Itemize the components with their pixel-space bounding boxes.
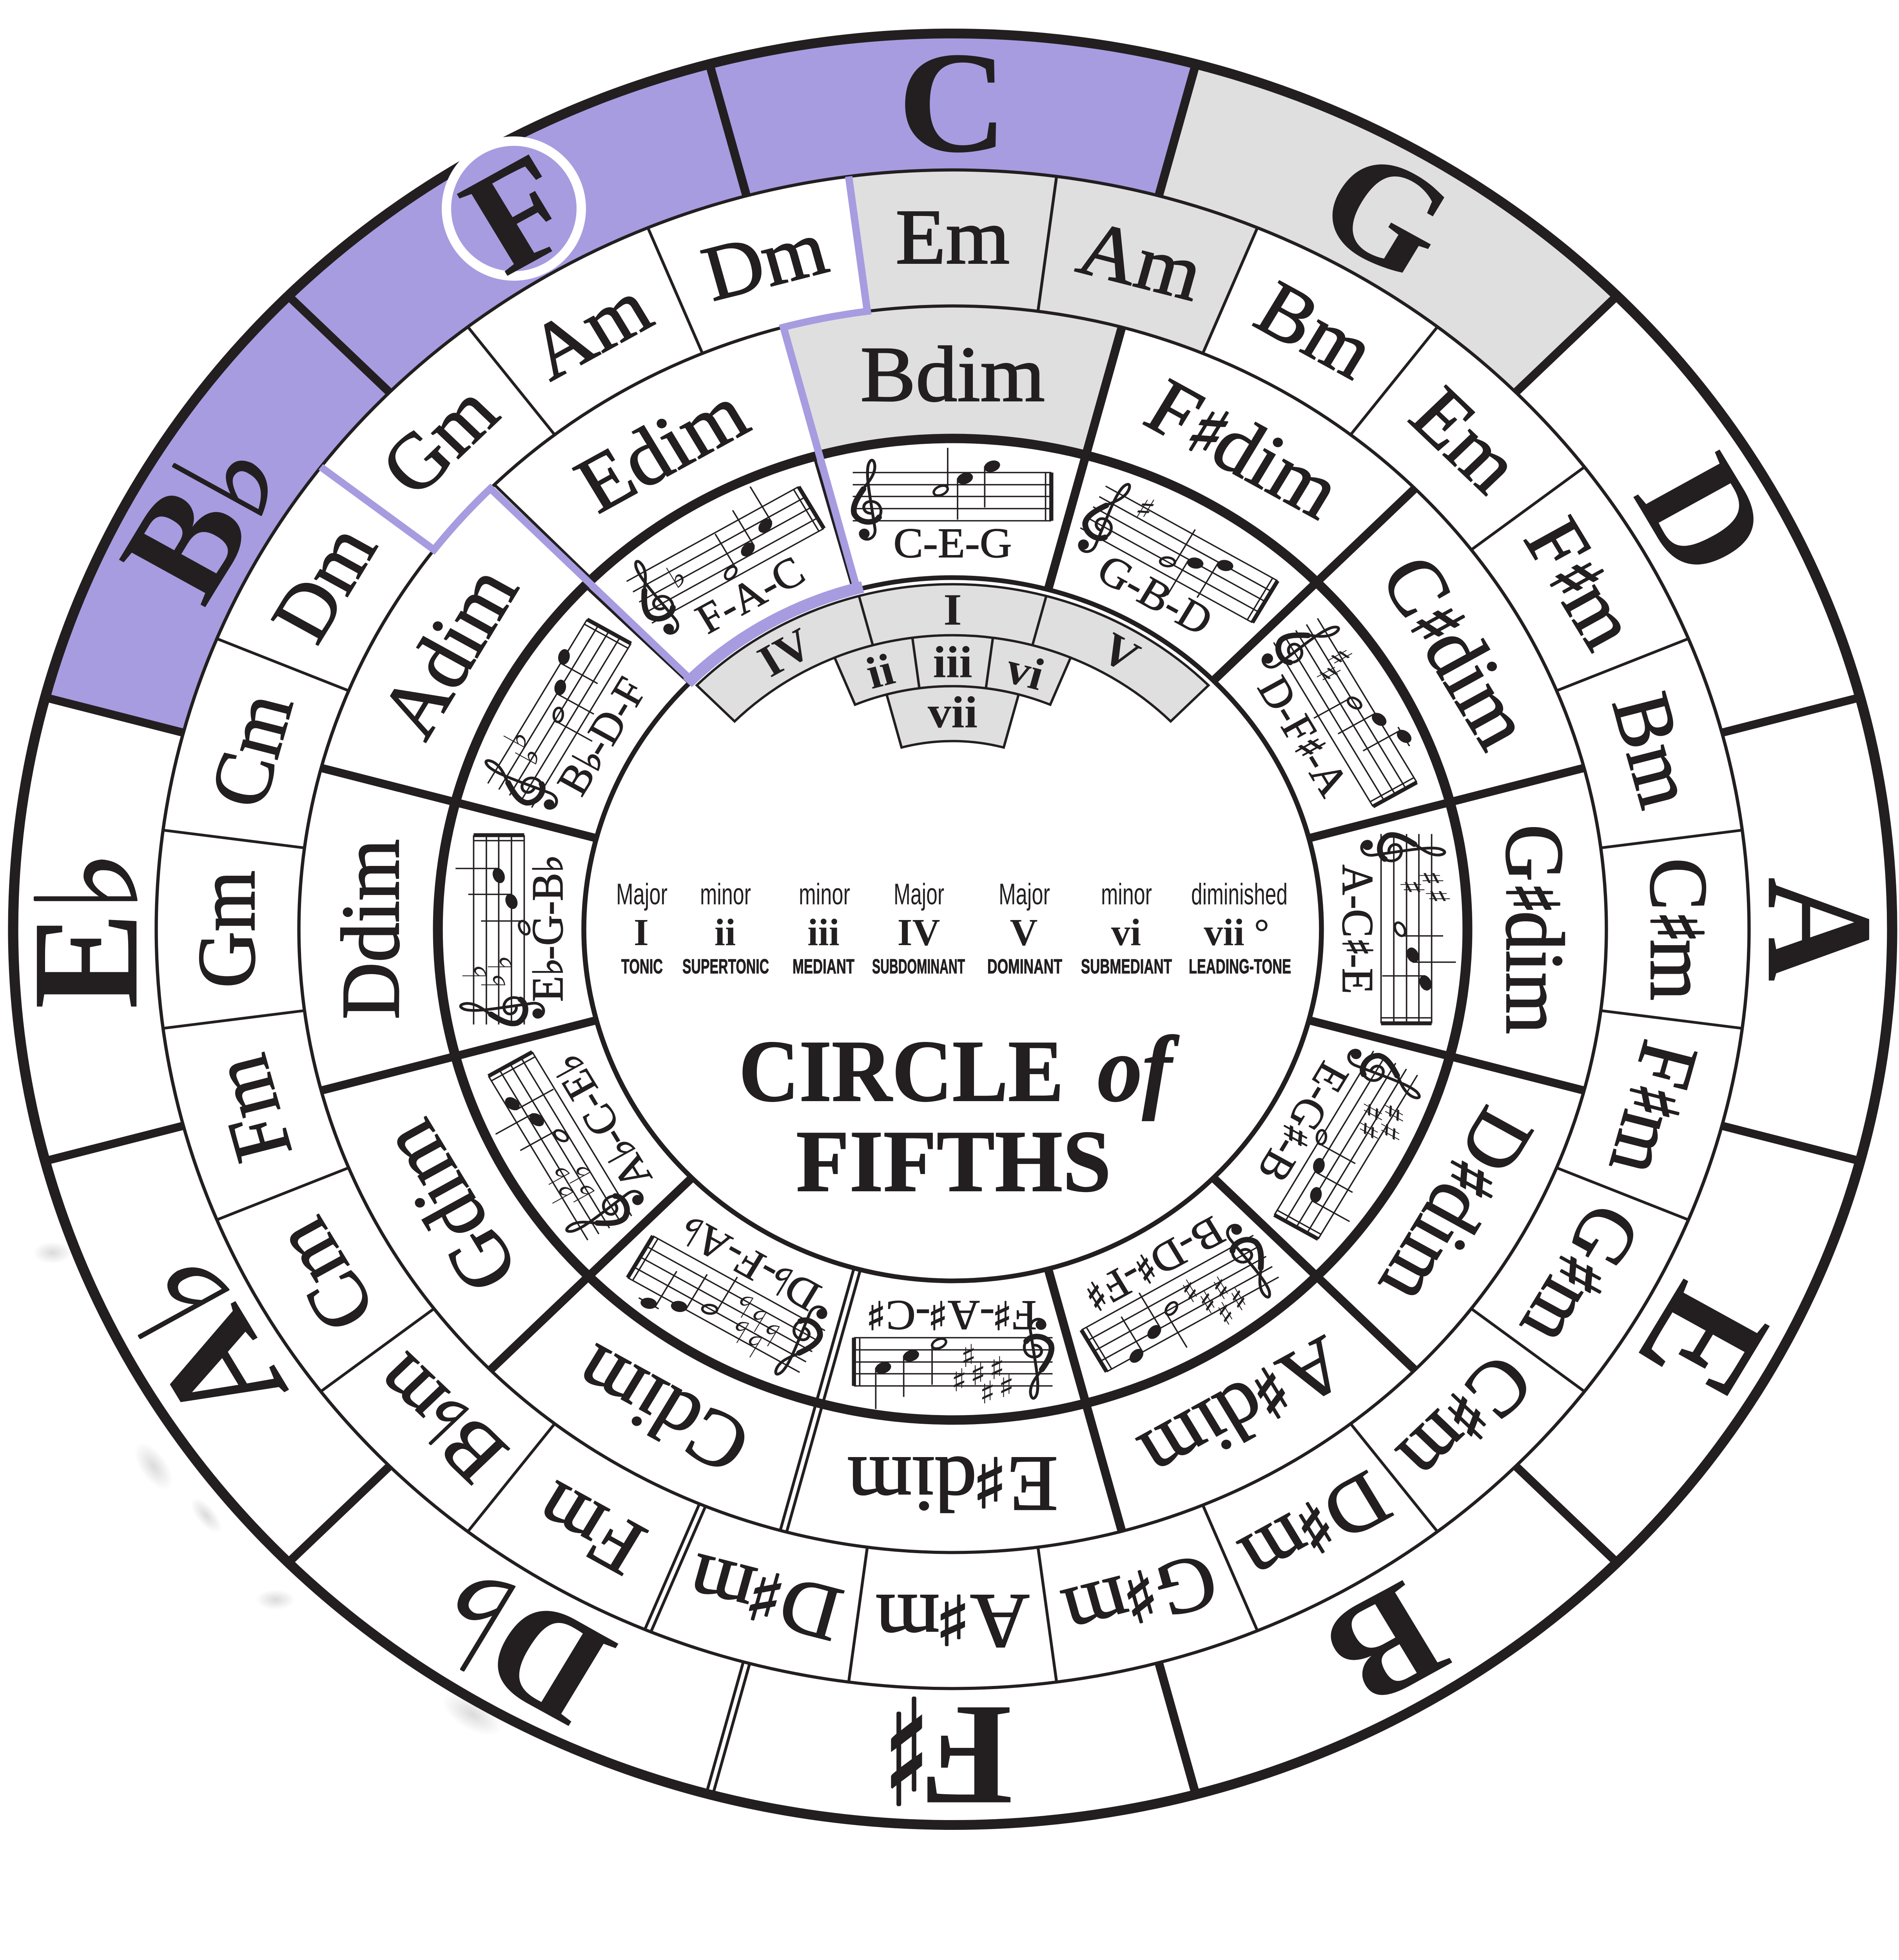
- chord: G#m: G♯m: [1504, 1190, 1660, 1361]
- staff: B-D#-F#: [1057, 1196, 1291, 1392]
- scale degree names: TONIC: [621, 955, 663, 978]
- chord: Gm: Gm: [181, 871, 272, 988]
- chord: Bm: Bm: [1241, 264, 1390, 396]
- chord: Edim: Edim: [561, 368, 762, 530]
- staff: E-G#-B: ♯♯♯♯: [1342, 1088, 1419, 1155]
- degree numerals: ii: [715, 911, 736, 954]
- chord: G#m: G♯m: [1054, 1537, 1227, 1659]
- degree numerals: vii °: [1204, 911, 1270, 954]
- key: G: G: [1293, 116, 1480, 311]
- chord: Dm: Dm: [693, 203, 836, 318]
- key: A: A: [1736, 877, 1899, 982]
- chord: Bm: Bm: [1594, 684, 1713, 816]
- quality labels: Major: [616, 878, 667, 911]
- chord: C#m: C ♯ m: [1633, 858, 1724, 1000]
- staff: B-D#-F#: B-D♯-F♯: [1077, 1207, 1233, 1320]
- staff: E-G#-B: [1233, 1028, 1438, 1250]
- staff: F#-A#-C#: ♯♯♯♯♯♯: [951, 1336, 1014, 1409]
- scale degree names: SUPERTONIC: [682, 955, 769, 978]
- chord: Am: Am: [513, 263, 666, 397]
- quality labels: diminished: [1191, 878, 1288, 911]
- degree numerals: vi: [1111, 911, 1141, 954]
- chord: Em: Em: [1393, 370, 1538, 509]
- minor chord ring: [181, 194, 1724, 1665]
- chord: G#dim: G ♯ dim: [1489, 824, 1581, 1034]
- diminished chord ring: [325, 330, 1581, 1528]
- chord: Cdim: Cdim: [559, 1328, 764, 1492]
- scale degree names: SUBMEDIANT: [1081, 955, 1172, 978]
- chord: Am: Am: [1069, 203, 1212, 318]
- numeral: IV: IV: [749, 619, 821, 687]
- scale degree names: SUBDOMINANT: [872, 955, 965, 978]
- title: of: [1097, 1017, 1179, 1121]
- staff: D-F#-A: D-F♯-A: [1248, 668, 1359, 804]
- quality labels: minor: [1101, 878, 1152, 911]
- purple scale outline: [321, 176, 867, 683]
- quality labels: minor: [799, 878, 850, 911]
- key: B flat: B♭: [87, 407, 317, 625]
- chord: D#m: D♯m: [1226, 1454, 1405, 1603]
- numeral: V: V: [1092, 623, 1148, 682]
- key: E: E: [1605, 1261, 1802, 1425]
- staff: Bb-D-F: ♭♭: [492, 723, 554, 771]
- chord: Fm: Fm: [519, 1465, 660, 1592]
- staff: Db-F-Ab: D♭-F-A♭: [672, 1207, 829, 1321]
- staff: F#-A#-C#: F♯-A♯-C♯: [869, 1292, 1037, 1339]
- quality labels: minor: [700, 878, 751, 911]
- key: B: B: [1300, 1552, 1472, 1739]
- degree numerals: V: [1010, 911, 1037, 954]
- numeral: vii: vii: [928, 688, 978, 737]
- chord: Cm: Cm: [255, 1205, 393, 1346]
- staff: Bb-D-F: [473, 611, 673, 831]
- chord: A#dim: A♯dim: [1126, 1319, 1362, 1500]
- key: D flat: D♭: [401, 1534, 637, 1757]
- scale degree names: MEDIANT: [793, 955, 854, 978]
- numeral: iii: iii: [933, 637, 972, 687]
- chord: Dm: Dm: [254, 510, 394, 656]
- key: E flat: E♭: [1, 849, 170, 1009]
- chord: Cm: Cm: [192, 684, 311, 816]
- staff: Ab-C-Eb: [468, 1029, 673, 1252]
- chord: Ddim: Ddim: [325, 839, 417, 1020]
- staff: F-A-C: F-A-C: [687, 546, 813, 642]
- degree numerals: [634, 911, 1270, 954]
- staff: G-B-D: [1056, 472, 1286, 662]
- staff: Db-F-Ab: ♭♭♭♭♭: [712, 1285, 793, 1368]
- quality labels: Major: [999, 878, 1050, 911]
- staff: Eb-G-Bb: E♭-G-B♭: [523, 857, 573, 1002]
- staff: G-B-D: ♯: [1128, 490, 1161, 529]
- staff: Eb-G-Bb: [455, 835, 573, 1025]
- chord: Fm: Fm: [193, 1047, 310, 1170]
- chord: Bdim: Bdim: [860, 330, 1045, 418]
- chord: C#m: C♯m: [1381, 1338, 1551, 1500]
- key: F sharp: F: [920, 1676, 1013, 1836]
- chord: D#m: D♯m: [678, 1537, 851, 1659]
- chord: Gdim: Gdim: [361, 1107, 535, 1307]
- staff: F#-A#-C#: [854, 1292, 1052, 1409]
- numeral: ii: ii: [861, 644, 900, 699]
- staff: Db-F-Ab: [617, 1196, 849, 1390]
- title: [739, 1017, 1179, 1210]
- chord: Adim: Adim: [361, 552, 535, 752]
- chord: Bbm: B♭m: [354, 1338, 524, 1499]
- key: F sharp: [885, 1664, 1013, 1836]
- chord: Gm: Gm: [363, 367, 515, 512]
- numeral: I: I: [943, 585, 962, 635]
- staff: C-E-G: [853, 448, 1051, 566]
- highlight fills: [44, 33, 1618, 733]
- scale degree names: [621, 955, 1291, 978]
- staff: F-A-C: [615, 466, 848, 662]
- numeral: vi: vi: [1001, 643, 1050, 700]
- roman numeral wedges: [697, 584, 1208, 748]
- chord: F#dim: F♯dim: [1132, 361, 1356, 535]
- degree numerals: IV: [898, 911, 940, 954]
- staff: Ab-C-Eb: ♭♭♭♭: [532, 1150, 609, 1217]
- staff: C-E-G: C-E-G: [894, 519, 1012, 566]
- key: C: C: [898, 22, 1008, 183]
- chord quality table: [616, 878, 1291, 978]
- chord: F#m: F♯m: [1507, 503, 1656, 663]
- staff: D-F#-A: [1232, 608, 1435, 829]
- staff: G-B-D: G-B-D: [1090, 545, 1221, 644]
- quality labels: Major: [894, 878, 944, 911]
- staff: B-D#-F#: ♯♯♯♯♯: [1173, 1252, 1258, 1341]
- staff: Eb-G-Bb: ♭♭♭: [456, 955, 520, 988]
- degree numerals: I: [634, 911, 649, 954]
- chord: A#m: A♯m: [876, 1578, 1030, 1665]
- staff: A-C#-E: ♯♯♯: [1392, 870, 1456, 904]
- chord: D#dim: D♯dim: [1362, 1094, 1551, 1319]
- staff: E-G#-B: E-G♯-B: [1248, 1054, 1359, 1190]
- chord: F#m: F♯m: [1592, 1033, 1716, 1184]
- staff: D-F#-A: ♯♯: [1302, 642, 1365, 690]
- title: FIFTHS: [796, 1112, 1111, 1210]
- chord: E#dim: E♯dim: [847, 1441, 1058, 1528]
- scale degree names: LEADING-TONE: [1189, 955, 1291, 978]
- key: F sharp: ♯: [885, 1664, 929, 1833]
- highlighted key: F: F: [437, 122, 602, 305]
- title: CIRCLE: [739, 1022, 1064, 1120]
- key: D: D: [1603, 430, 1804, 601]
- staff: F-A-C: ♭: [660, 557, 693, 596]
- quality labels: [616, 878, 1288, 911]
- scale degree names: DOMINANT: [987, 955, 1062, 978]
- chord: Em: Em: [896, 194, 1010, 280]
- staff ring: [455, 448, 1456, 1409]
- staff: Ab-C-Eb: A♭-C-E♭: [542, 1047, 662, 1197]
- staff: Bb-D-F: B♭-D-F: [547, 670, 657, 803]
- staff: A-C#-E: [1333, 834, 1456, 1023]
- degree numerals: iii: [807, 911, 840, 954]
- key: A flat: A♭: [85, 1230, 319, 1455]
- staff: A-C#-E: A-C ♯ -E: [1333, 864, 1382, 994]
- chord: C#dim: C♯dim: [1363, 541, 1551, 762]
